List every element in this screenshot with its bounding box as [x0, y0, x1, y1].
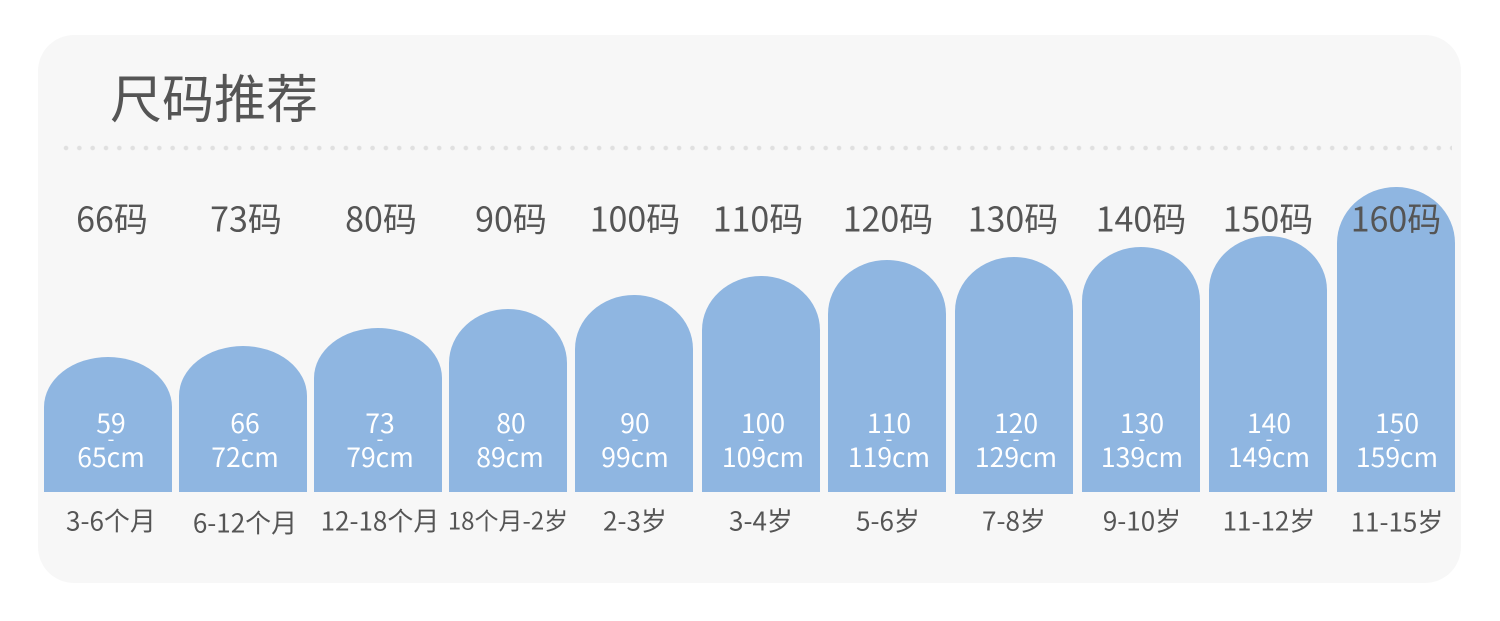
text: - — [1394, 423, 1400, 452]
age range: 12-18个月 — [321, 501, 439, 538]
text: - — [632, 423, 638, 452]
text: 99cm — [601, 436, 669, 475]
age range: 5-6岁 — [856, 501, 920, 538]
size label: 66码 — [76, 193, 148, 242]
size column: 90码 — [448, 193, 568, 537]
size label: 120码 — [843, 193, 933, 242]
size column: 160码 — [1337, 187, 1455, 539]
size column: 150码 — [1209, 193, 1327, 538]
size label: 100码 — [590, 193, 680, 242]
size column: 120码 — [828, 193, 946, 538]
text: 109cm — [722, 436, 804, 475]
size label: 73码 — [210, 193, 282, 242]
height range: 130 — [1120, 402, 1164, 441]
size column: 100码 — [575, 193, 693, 538]
height bar — [179, 346, 307, 492]
text: 149cm — [1228, 436, 1310, 475]
height bar — [1337, 187, 1455, 492]
age range: 3-6个月 — [66, 501, 156, 538]
size label: 90码 — [475, 193, 547, 242]
text: 159cm — [1356, 436, 1438, 475]
height bar — [702, 276, 820, 492]
title: 尺码推荐 — [110, 58, 318, 133]
text: 89cm — [476, 436, 544, 475]
age range: 2-3岁 — [603, 501, 667, 538]
height bar — [955, 257, 1073, 494]
size label: 110码 — [713, 193, 803, 242]
height range: 150 — [1375, 402, 1419, 441]
height range: 80 — [496, 402, 526, 441]
height bar — [44, 357, 172, 492]
height range: 90 — [620, 402, 650, 441]
text: 79cm — [346, 436, 414, 475]
height range: 120 — [994, 402, 1038, 441]
text: - — [377, 423, 383, 452]
height bar — [314, 328, 442, 492]
text: 129cm — [975, 436, 1057, 475]
size column: 140码 — [1082, 193, 1200, 538]
size label: 130码 — [968, 193, 1058, 242]
height range: 59 — [96, 402, 126, 441]
size column: 110码 — [702, 193, 820, 538]
text: - — [758, 423, 764, 452]
text: 72cm — [211, 436, 279, 475]
size label: 80码 — [345, 193, 417, 242]
age range: 9-10岁 — [1103, 501, 1181, 538]
size column: 66码 — [44, 193, 172, 538]
height bar — [575, 295, 693, 492]
age range: 18个月-2岁 — [448, 502, 568, 537]
height bar — [1209, 236, 1327, 492]
height range: 66 — [230, 402, 260, 441]
text: 139cm — [1101, 436, 1183, 475]
text: - — [508, 423, 514, 452]
height bar — [449, 309, 567, 492]
height bar — [1082, 247, 1200, 492]
text: - — [886, 423, 892, 452]
age range: 7-8岁 — [982, 501, 1046, 538]
size label: 160码 — [1351, 193, 1441, 242]
size label: 150码 — [1223, 193, 1313, 242]
size column: 130码 — [955, 193, 1073, 538]
size column: 73码 — [179, 193, 307, 540]
text: - — [1266, 423, 1272, 452]
text: - — [242, 423, 248, 452]
text: 119cm — [848, 436, 930, 475]
text: - — [1139, 423, 1145, 452]
height range: 73 — [365, 402, 395, 441]
height bar — [828, 260, 946, 492]
text: - — [108, 423, 114, 452]
size label: 140码 — [1096, 193, 1186, 242]
age range: 3-4岁 — [729, 501, 793, 538]
text: 65cm — [77, 436, 145, 475]
age range: 11-15岁 — [1351, 502, 1443, 539]
height range: 140 — [1247, 402, 1291, 441]
text: - — [1013, 423, 1019, 452]
height range: 100 — [741, 402, 785, 441]
age range: 11-12岁 — [1223, 501, 1315, 538]
age range: 6-12个月 — [193, 503, 297, 540]
height range: 110 — [867, 402, 911, 441]
size column: 80码 — [314, 193, 442, 538]
